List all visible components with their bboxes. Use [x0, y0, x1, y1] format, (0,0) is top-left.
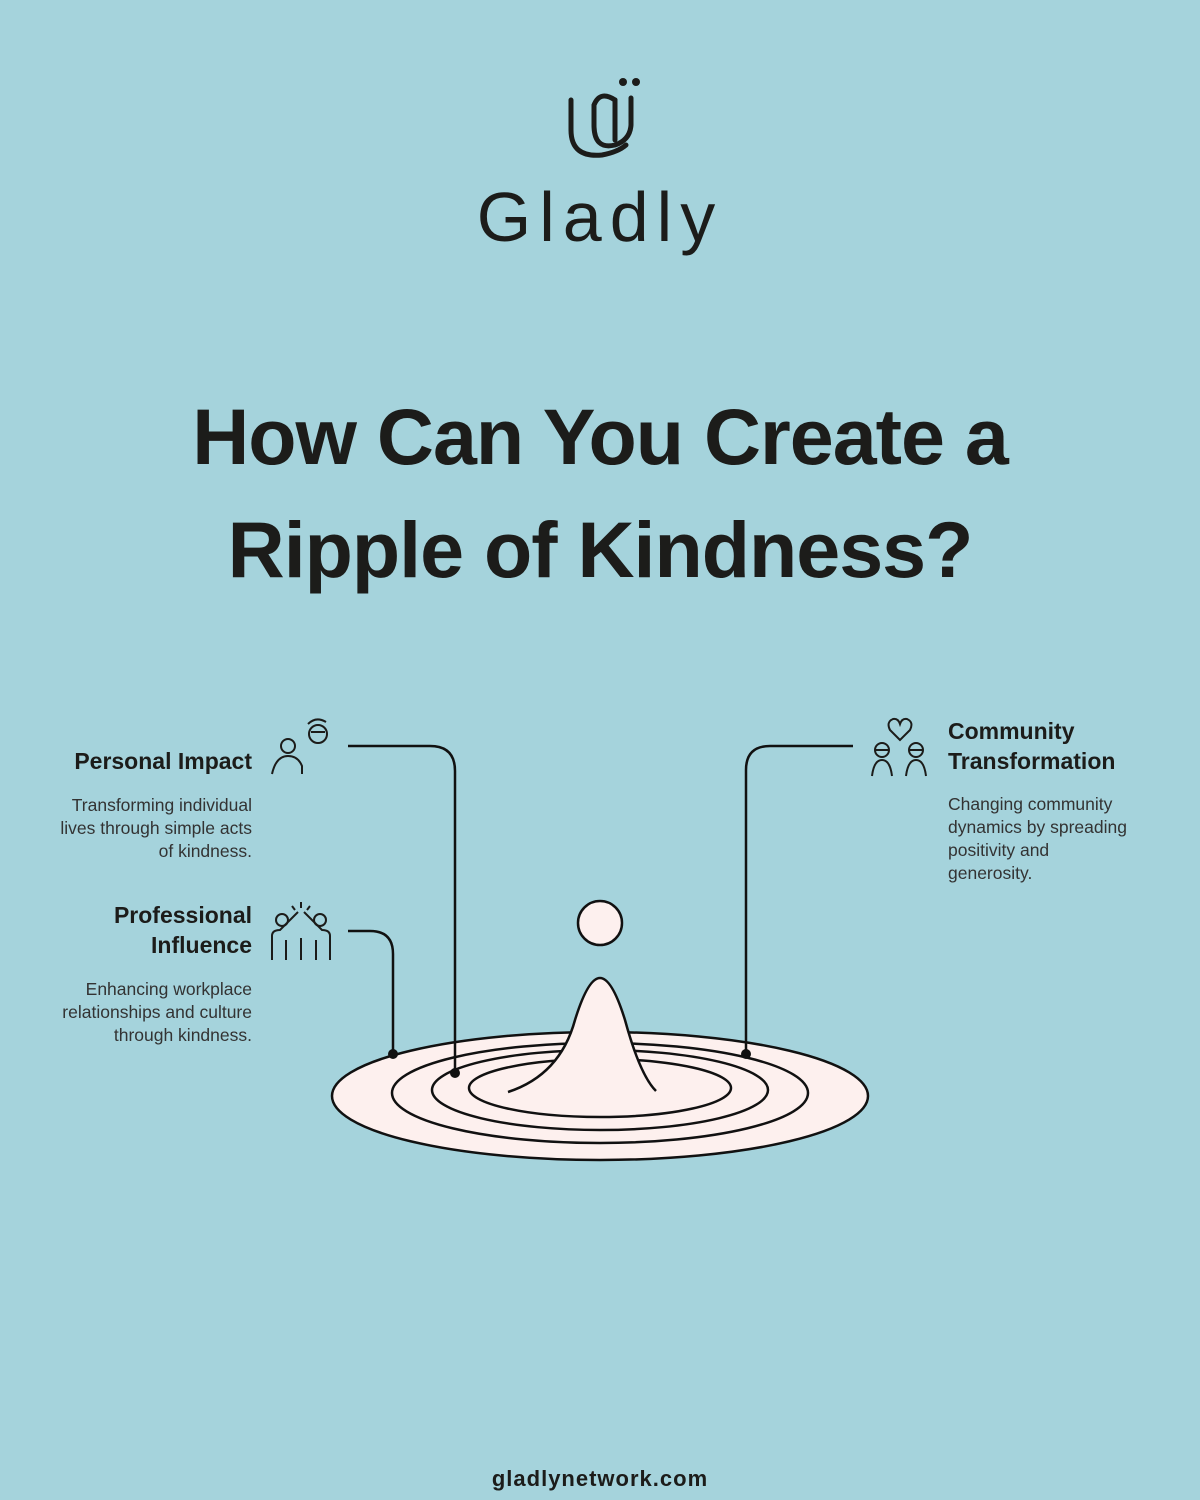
panel: professional influence: Influence: [151, 932, 252, 958]
panel: community transformation: Changing community dynamics by spreading positivity and generosity.: [948, 794, 1127, 883]
icon: person with heart: [271, 718, 328, 774]
panel: community transformation: [948, 718, 1127, 883]
panel: professional influence: Professional: [114, 902, 252, 928]
title: Ripple of Kindness?: [228, 505, 972, 594]
panel: community transformation: Transformation: [948, 748, 1115, 774]
panel: professional influence: Enhancing workplace relationships and culture through kindness.: [62, 979, 252, 1045]
icon: high five: [271, 902, 331, 960]
panel: community transformation: Community: [948, 718, 1074, 744]
title: [192, 392, 1010, 594]
logo icon: [568, 78, 640, 158]
panel: personal impact: Transforming individual lives through simple acts of kindness.: [60, 795, 252, 861]
panel: personal impact: [60, 748, 252, 861]
panel: professional influence: [62, 902, 252, 1045]
icon: community: [871, 718, 927, 776]
panel: personal impact: Personal Impact: [74, 748, 252, 774]
title: How Can You Create a: [192, 392, 1008, 481]
brand name: Gladly: [477, 178, 723, 256]
footer url: gladlynetwork.com: [492, 1466, 708, 1491]
